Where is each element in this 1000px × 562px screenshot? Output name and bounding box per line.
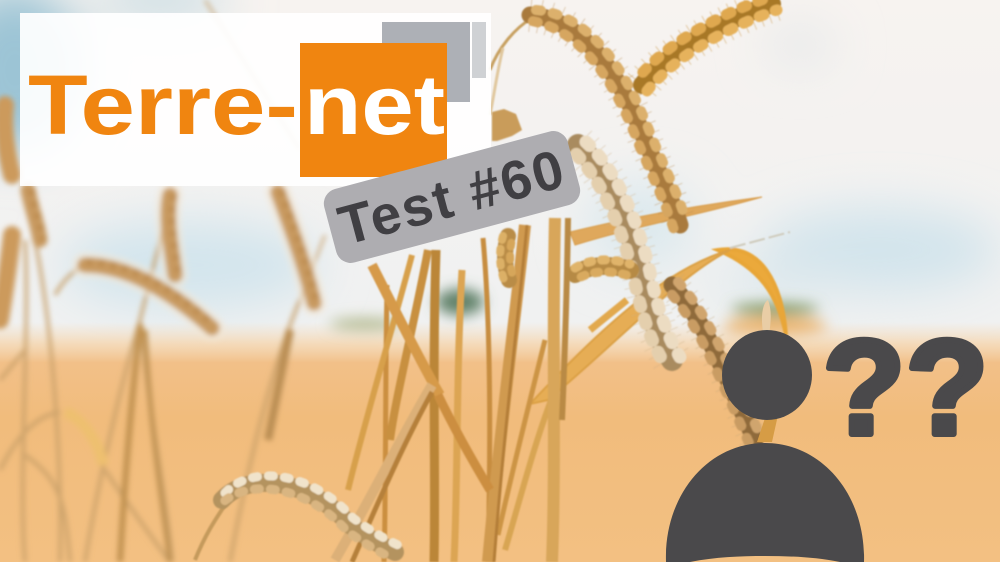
badge: Test #60: Test #60: [332, 137, 572, 257]
ear: top right: [637, 0, 782, 91]
leaf: yellow drooping: [718, 249, 786, 335]
ear: pale centre: [570, 142, 680, 363]
ear: behind badge: [500, 236, 514, 280]
logo light grey bar: [472, 22, 486, 78]
icon: person with question marks: [666, 312, 988, 562]
question mark 2: ?: [906, 312, 988, 463]
ear: lower left: [219, 476, 398, 558]
wheat ears: [219, 0, 782, 558]
ear: short side ear: [575, 260, 630, 280]
question mark 1: ?: [823, 312, 905, 463]
logo grey corner: [382, 22, 470, 102]
logo wordmark: Terre-: [28, 58, 298, 152]
ear: beside logo: [492, 109, 522, 141]
person body: [666, 443, 864, 562]
leaf: long diagonal: [530, 250, 730, 404]
stem in front of person gap: [757, 415, 778, 442]
leaf: horizontal top: [570, 197, 762, 245]
blurred background wheat: [0, 0, 325, 562]
logo wordmark: net: net: [304, 58, 445, 152]
ear: lower right: [666, 282, 761, 443]
logo panel: [20, 13, 491, 186]
ear: top centre: [524, 10, 686, 230]
logo orange square: [300, 43, 447, 177]
foreground stems and leaves: [195, 18, 790, 562]
person head: [722, 330, 812, 420]
